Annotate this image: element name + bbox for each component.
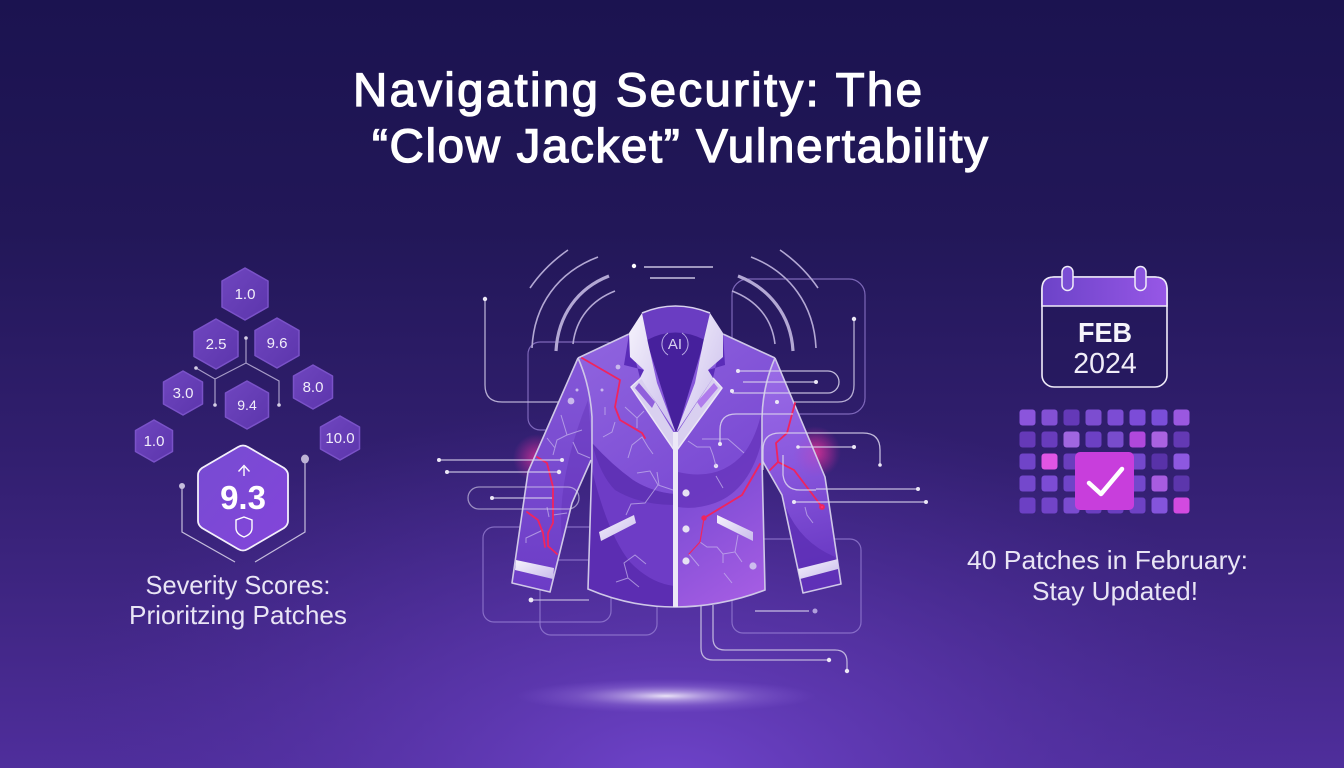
day grid: [1020, 410, 1190, 514]
calendar icon: 2024: [1073, 348, 1137, 380]
left front panel shading: [588, 443, 674, 607]
calendar icon: FEB: [1078, 317, 1132, 348]
circuit wires over jacket: [437, 369, 928, 614]
lapels: [629, 313, 676, 433]
hexagon labels: 9.6: [267, 335, 287, 352]
sleeve shading: [782, 497, 841, 593]
hexagon labels: 9.4: [237, 397, 257, 413]
main score hexagon 9.3: 9.3: [220, 479, 266, 516]
lapel shadow: [624, 334, 725, 378]
panel: severity scores: [129, 268, 360, 630]
caption: severity scores: Prioritzing Patches: [129, 600, 347, 630]
hexagon labels: 10.0: [325, 430, 355, 447]
main score hexagon 9.3: [198, 446, 288, 550]
AI badge: AI: [668, 336, 682, 353]
title: “Clow Jacket” Vulnertability: [372, 120, 988, 173]
hexagon scores: [136, 268, 360, 462]
caption: patches: 40 Patches in February:: [967, 545, 1248, 575]
placket: [673, 432, 678, 607]
hexagon labels: 8.0: [303, 379, 323, 396]
right sleeve: [762, 358, 841, 593]
caption: patches: Stay Updated!: [1032, 576, 1198, 606]
sleeve outlines: [512, 358, 841, 593]
body outline: [578, 334, 775, 607]
caption: severity scores: [129, 570, 347, 630]
connector lines between hexagons: [194, 336, 281, 407]
pockets: [599, 515, 753, 541]
check badge: [1075, 452, 1134, 510]
hexagon labels: 3.0: [173, 385, 193, 402]
right front panel shading: [678, 410, 762, 508]
AI badge: [662, 333, 688, 355]
hexagon labels: 1.0: [144, 433, 164, 450]
collar interior: [642, 306, 710, 435]
buttons: [568, 365, 757, 570]
left sleeve: [512, 358, 592, 592]
jacket body: [578, 334, 775, 607]
hexagon labels: [144, 286, 355, 450]
signal arcs: [530, 250, 818, 351]
circuit wires behind jacket: [483, 297, 856, 673]
red cracks: [527, 358, 824, 554]
calendar icon: [1042, 266, 1167, 387]
caption: patches: [967, 545, 1248, 606]
red glows: [513, 426, 841, 482]
panel: patches calendar: [967, 266, 1248, 606]
jacket: [512, 306, 841, 607]
title: [353, 64, 988, 173]
title: Navigating Security: The: [353, 64, 922, 117]
connector around main score: [179, 454, 309, 562]
cuffs: [515, 559, 838, 579]
hexagon labels: 2.5: [206, 336, 226, 353]
hexagon labels: 1.0: [235, 286, 255, 303]
thin cracks: [526, 407, 813, 587]
circuit panels behind jacket: [483, 279, 865, 635]
caption: severity scores: Severity Scores:: [146, 570, 330, 600]
